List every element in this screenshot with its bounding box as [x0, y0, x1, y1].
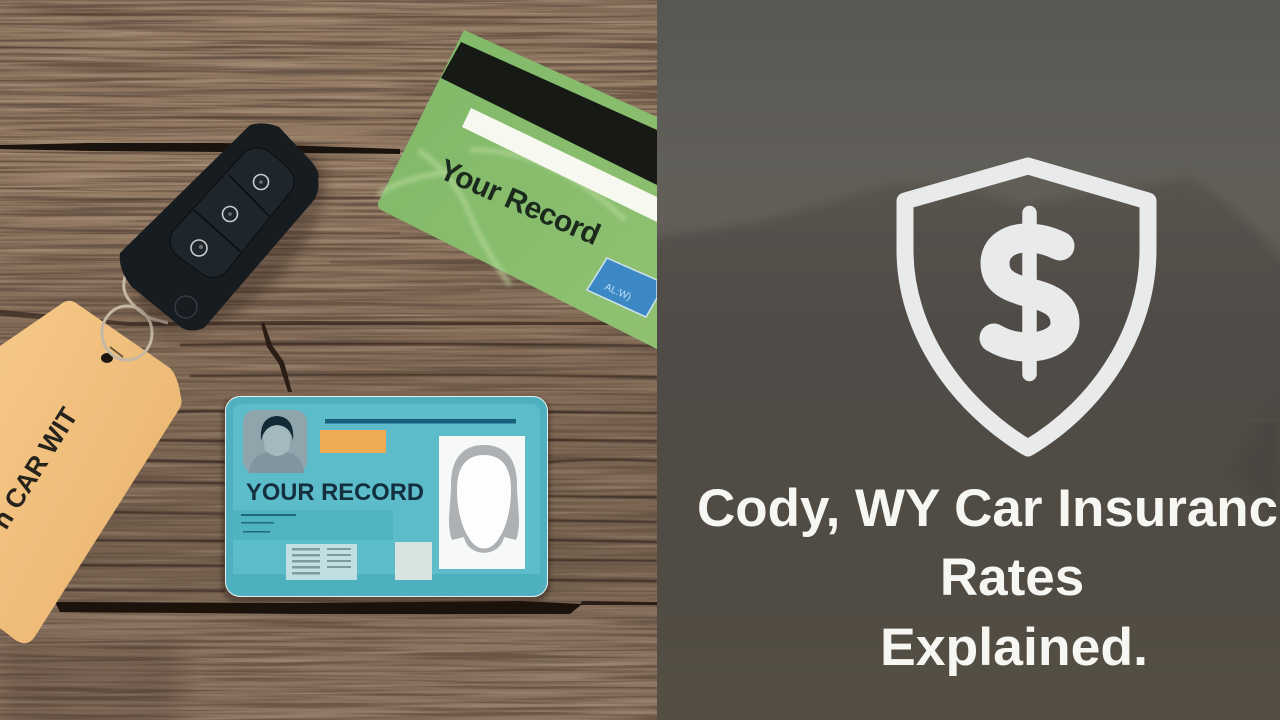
icon: key ring [102, 270, 168, 360]
misty mountain background [657, 228, 1280, 720]
id header bar [325, 419, 516, 424]
panel: teal ID card [222, 396, 550, 602]
id data table [286, 544, 357, 580]
magnetic stripe [441, 42, 657, 185]
id orange block [320, 430, 386, 453]
panel: dark grey title panel [657, 158, 1280, 720]
id photo [439, 436, 525, 569]
id stamp [395, 542, 432, 580]
card text: Your Record [434, 153, 605, 252]
icon: key fob [120, 123, 331, 337]
id small text lines [241, 514, 296, 532]
blue badge: AL:W) [603, 282, 633, 303]
panel: wooden tabletop photo [0, 0, 657, 720]
id card text: YOUR RECORD [246, 479, 424, 506]
id portrait silhouette [243, 410, 307, 473]
icon: paper tag [0, 301, 182, 643]
icon: shield with dollar sign [905, 166, 1148, 448]
title: Explained. [880, 618, 1148, 677]
signature strip [462, 108, 657, 222]
blue badge [587, 258, 657, 317]
wood planks background [0, 0, 657, 720]
title [697, 479, 1280, 677]
title: Rates [940, 548, 1084, 607]
panel: green card with your record [378, 30, 657, 349]
dollar symbol [994, 213, 1065, 374]
key fob button panel [170, 148, 294, 278]
